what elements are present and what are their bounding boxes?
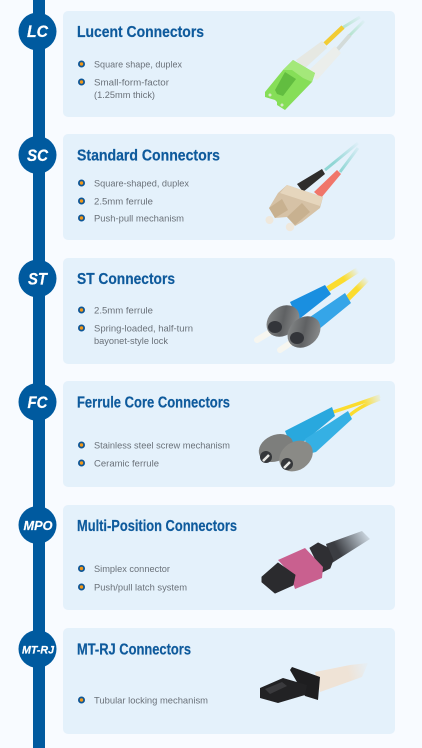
bullet list: 2.5mm ferrule [94,306,153,316]
heading: Ferrule Core Connectors [77,394,230,412]
heading: Multi-Position Connectors [77,518,237,535]
bullet list: Stainless steel screw mechanism [94,440,230,452]
badge: LC [27,23,49,41]
badge [18,136,56,174]
icon: LC connector [265,17,364,110]
panel: FC [18,381,395,487]
badge: MPO [24,518,52,533]
panel: LC [18,11,395,117]
badge [18,12,56,50]
badge [18,630,56,668]
icon: MT-RJ connector [260,663,368,703]
badge: MT-RJ [22,644,55,656]
badge [18,260,56,298]
timeline rail [33,0,45,748]
bullet list [78,178,189,224]
panel background [63,258,395,364]
heading: MT-RJ Connectors [77,642,191,658]
icon: MPO connector [262,531,370,593]
panel: SC [18,134,395,240]
badge: SC [27,147,49,165]
bullet list: Simplex connector [94,564,171,575]
badge: ST [28,270,49,288]
icon: ST connector [257,270,367,354]
panel: MPO [18,505,395,610]
bullet list: Square-shaped, duplex [94,178,189,190]
bullet list: Small-form-factor [94,78,170,88]
icon: FC connector [254,396,380,478]
panel background [63,628,395,734]
bullet list: Tubular locking mechanism [94,696,208,706]
bullet list: Spring-loaded, half-turn [94,324,193,334]
panel background [63,381,395,487]
panel background [63,505,395,610]
bullet list [78,306,193,347]
heading: Lucent Connectors [77,24,204,41]
bullet list: 2.5mm ferrule [94,196,153,208]
bullet list: Square shape, duplex [94,60,182,70]
bullet list [78,564,187,594]
panel background [63,134,395,240]
bullet list [78,440,230,470]
heading: Standard Connectors [77,148,220,164]
badge [18,506,56,544]
panel: MT-RJ [18,628,395,734]
bullet list [78,60,182,101]
bullet list: Ceramic ferrule [94,458,159,470]
heading: ST Connectors [77,271,175,288]
badge [18,383,56,421]
bullet list: bayonet-style lock [94,336,168,347]
bullet list: Push-pull mechanism [94,214,184,224]
panel background [63,11,395,117]
panel: ST [18,258,395,364]
bullet list: (1.25mm thick) [94,90,155,101]
badge: FC [28,394,48,412]
icon: SC connector [266,143,358,231]
bullet list: Push/pull latch system [94,582,187,594]
